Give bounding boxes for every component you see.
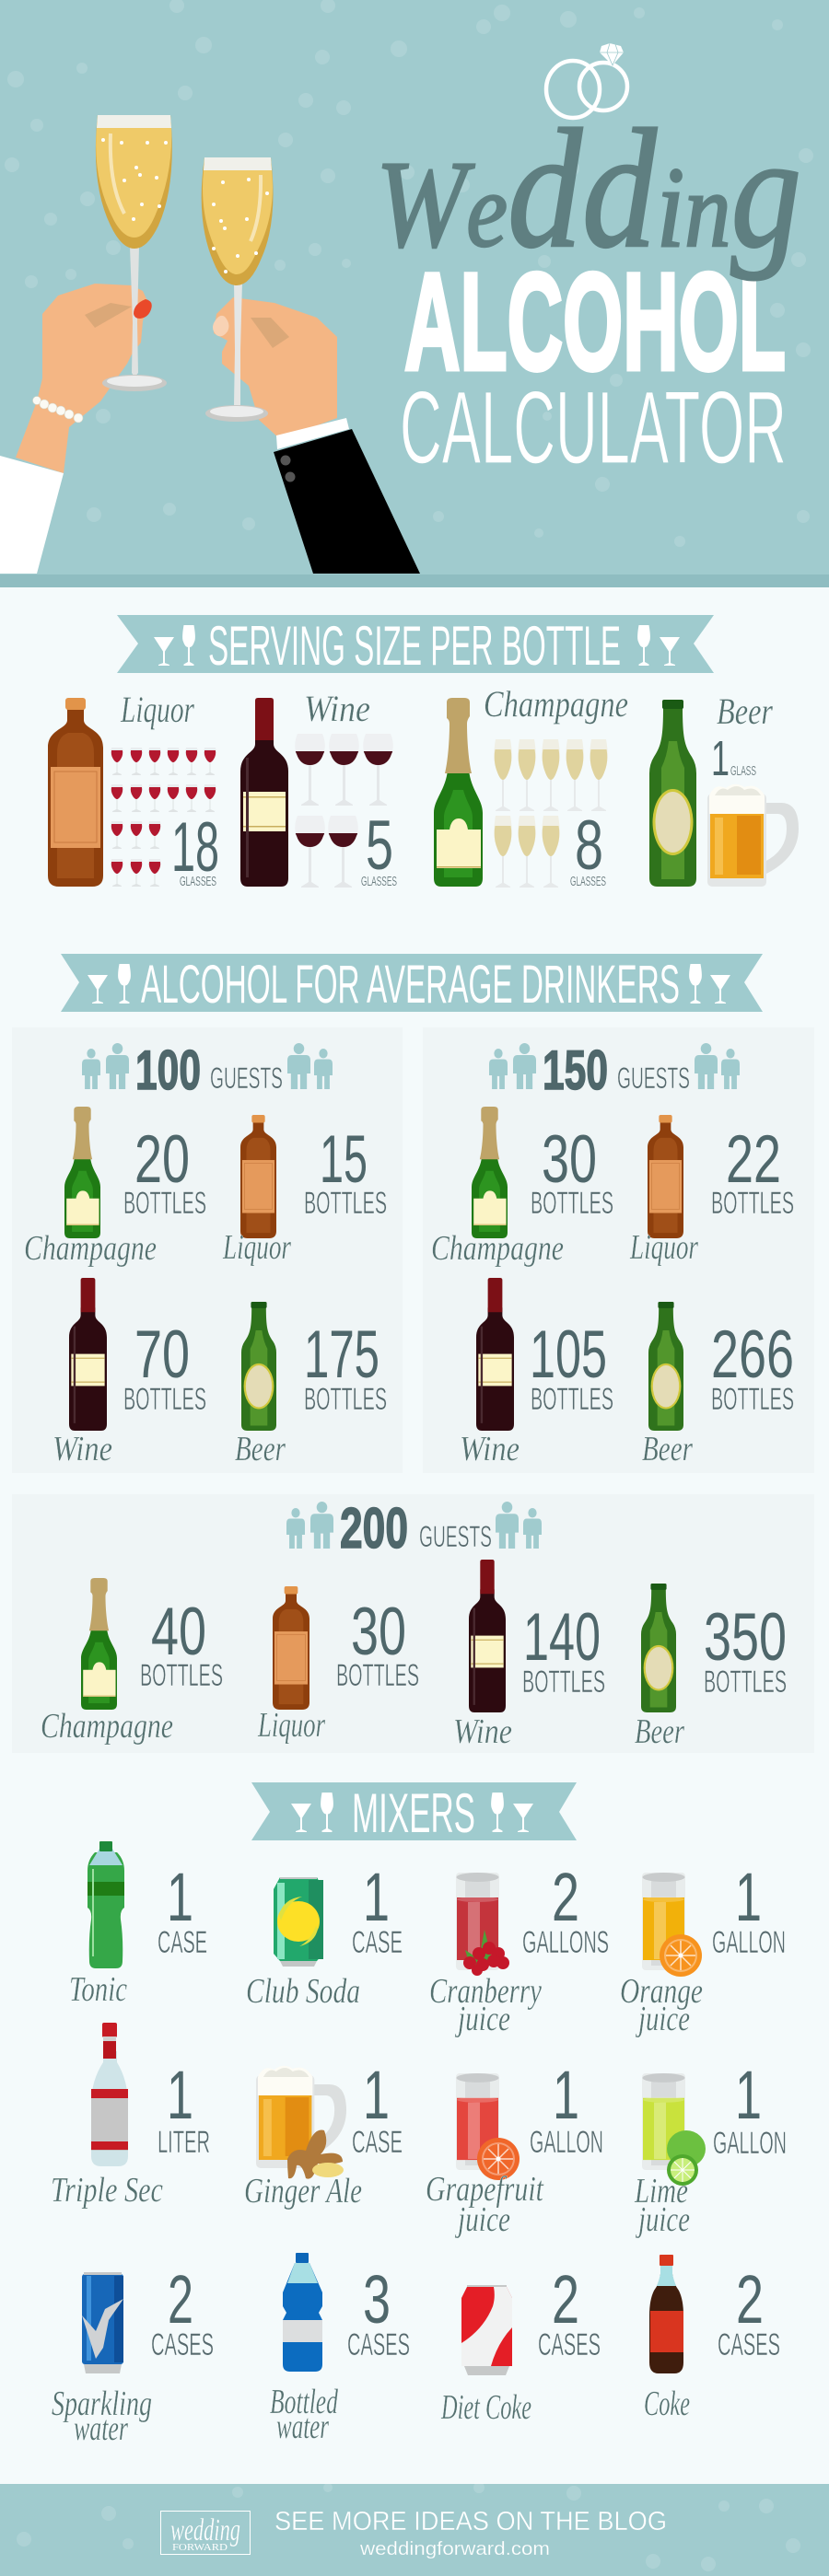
bokeh dots bbox=[5, 0, 813, 547]
beer: 350 bottles: Beer bbox=[635, 1712, 684, 1751]
liquor serving group: GLASSES bbox=[180, 875, 216, 889]
mixer: tonic: 1 bbox=[167, 1859, 193, 1935]
champagne: 20 bottles: Champagne bbox=[24, 1229, 157, 1268]
thumb nail bbox=[213, 316, 228, 336]
mixer: sparkling water bbox=[52, 2261, 214, 2448]
right hand bbox=[214, 297, 337, 439]
mixer: diet coke bbox=[440, 2261, 601, 2427]
beer serving group: 1 bbox=[711, 731, 730, 786]
champagne serving group: GLASSES bbox=[570, 875, 606, 889]
liquor: 30 bottles bbox=[257, 1586, 419, 1745]
beer: 266 bottles: 266 bbox=[711, 1317, 794, 1392]
mixer: coke: CASES bbox=[718, 2327, 780, 2362]
mixer: bottled water bbox=[270, 2253, 410, 2446]
wine: 140 bottles: BOTTLES bbox=[522, 1665, 605, 1700]
footer url: weddingforward.com bbox=[359, 2539, 550, 2559]
title: Wedding: Wedding bbox=[376, 95, 801, 284]
mixer: orange juice: 1 bbox=[735, 1859, 762, 1935]
footer bbox=[0, 2482, 829, 2576]
groom's sleeve bbox=[274, 418, 420, 574]
wine: 140 bottles: 140 bbox=[523, 1600, 601, 1675]
mixer: coke: 2 bbox=[736, 2261, 764, 2338]
beer serving group bbox=[649, 690, 799, 887]
icon: mug with ginger bbox=[256, 2066, 346, 2179]
champagne: 20 bottles: 20 bbox=[134, 1122, 190, 1197]
guests heading: 150: 150 bbox=[543, 1039, 608, 1101]
wine: 105 bottles: Wine bbox=[460, 1430, 520, 1468]
icon: diet coke can bbox=[461, 2285, 512, 2375]
guests heading: 100: 100 bbox=[135, 1039, 201, 1101]
mixer: grapefruit juice: GALLON bbox=[530, 2125, 603, 2160]
mixer: grapefruit juice bbox=[426, 2057, 603, 2239]
mixer: lime juice: Lime bbox=[634, 2172, 688, 2210]
mixer: triple sec: Triple Sec bbox=[51, 2171, 163, 2210]
banner: mixers: MIXERS bbox=[352, 1782, 475, 1844]
banner: mixers bbox=[251, 1782, 577, 1844]
liquor: 30 bottles: Liquor bbox=[257, 1706, 325, 1745]
wine: 105 bottles bbox=[460, 1278, 613, 1468]
guests heading: 200: 200 bbox=[340, 1497, 408, 1561]
icon: glass with lime bbox=[642, 2073, 706, 2186]
wine: 105 bottles: BOTTLES bbox=[531, 1382, 613, 1417]
mixer: lime juice: 1 bbox=[735, 2057, 762, 2133]
mixer: grapefruit juice: Grapefruit bbox=[426, 2170, 544, 2209]
mixer: grapefruit juice: juice bbox=[454, 2200, 510, 2239]
panel: 100 guests bbox=[12, 1027, 403, 1473]
mixer: coke: Coke bbox=[644, 2385, 690, 2423]
beer: 266 bottles: Beer bbox=[642, 1430, 693, 1468]
mixer: diet coke: 2 bbox=[552, 2261, 579, 2338]
liquor: 30 bottles: 30 bbox=[351, 1595, 406, 1669]
logo: wedding forward: wedding bbox=[170, 2513, 240, 2547]
mixer: sparkling water: water bbox=[74, 2409, 128, 2448]
icon: club soda can bbox=[274, 1877, 323, 1967]
mixer: ginger ale bbox=[244, 2057, 403, 2210]
wine serving group bbox=[240, 688, 397, 889]
mixer: bottled water: 3 bbox=[363, 2261, 391, 2338]
liquor: 22 bottles: 22 bbox=[726, 1122, 781, 1197]
wine: 70 bottles: 70 bbox=[134, 1317, 190, 1392]
mixer: club soda: 1 bbox=[363, 1859, 390, 1935]
wine: 70 bottles: BOTTLES bbox=[123, 1382, 206, 1417]
beer serving group: Beer bbox=[717, 690, 773, 732]
champagne: 20 bottles: BOTTLES bbox=[123, 1186, 206, 1221]
beer: 350 bottles bbox=[635, 1584, 787, 1751]
mixer: triple sec: 1 bbox=[167, 2057, 193, 2133]
mixer: diet coke: CASES bbox=[538, 2327, 601, 2362]
right champagne glass bbox=[202, 157, 273, 422]
mixer: coke bbox=[644, 2255, 780, 2423]
champagne: 40 bottles: Champagne bbox=[41, 1707, 173, 1746]
liquor: 22 bottles: Liquor bbox=[629, 1228, 698, 1267]
icon: triple sec bottle bbox=[91, 2023, 128, 2166]
guests heading: 200 bbox=[286, 1497, 542, 1561]
mixer: orange juice: juice bbox=[635, 2000, 690, 2038]
mixer: grapefruit juice: 1 bbox=[553, 2057, 579, 2133]
icon: coke bottle bbox=[649, 2255, 683, 2373]
beer serving group: GLASS bbox=[730, 764, 756, 779]
mixer: bottled water: CASES bbox=[347, 2327, 410, 2362]
icon: sparkling water can bbox=[82, 2272, 123, 2373]
liquor: 15 bottles: Liquor bbox=[222, 1228, 291, 1267]
wine serving group: Wine bbox=[304, 688, 370, 729]
champagne: 30 bottles bbox=[431, 1107, 613, 1268]
mixer: triple sec: LITER bbox=[158, 2125, 210, 2160]
mixer: orange juice bbox=[620, 1859, 786, 2038]
champagne serving group bbox=[434, 683, 628, 889]
guests heading: 100 bbox=[82, 1039, 333, 1101]
logo: wedding forward: FORWARD bbox=[172, 2542, 228, 2553]
mixer: orange juice: Orange bbox=[620, 1972, 703, 2011]
panel: 200 guests bbox=[12, 1494, 814, 1753]
header panel bbox=[0, 0, 829, 587]
beer: 175 bottles: 175 bbox=[304, 1317, 379, 1392]
logo: wedding forward bbox=[160, 2512, 251, 2554]
guests heading: 150: GUESTS bbox=[617, 1062, 690, 1095]
champagne: 30 bottles: Champagne bbox=[431, 1229, 564, 1268]
beer: 266 bottles bbox=[642, 1302, 794, 1468]
beer: 175 bottles: BOTTLES bbox=[304, 1382, 387, 1417]
mixer: club soda: Club Soda bbox=[246, 1972, 360, 2011]
panel: 150 guests bbox=[423, 1027, 814, 1473]
mixer: sparkling water: Sparkling bbox=[52, 2385, 152, 2423]
champagne: 30 bottles: BOTTLES bbox=[531, 1186, 613, 1221]
liquor: 30 bottles: BOTTLES bbox=[336, 1658, 419, 1693]
champagne: 40 bottles: BOTTLES bbox=[140, 1658, 223, 1693]
mixer: cranberry juice: juice bbox=[454, 2000, 510, 2038]
guests heading: 150 bbox=[489, 1039, 740, 1101]
champagne serving group: 8 bbox=[575, 806, 603, 885]
mixer: cranberry juice bbox=[429, 1859, 609, 2038]
mixer: lime juice: juice bbox=[635, 2200, 690, 2239]
champagne: 40 bottles: 40 bbox=[151, 1595, 206, 1669]
icon: tonic bottle bbox=[88, 1841, 124, 1968]
mixer: tonic: Tonic bbox=[69, 1970, 127, 2009]
liquor serving group: 18 bbox=[171, 808, 219, 887]
mixer: ginger ale: Ginger Ale bbox=[244, 2172, 362, 2210]
champagne serving group: Champagne bbox=[484, 683, 628, 725]
mixer: bottled water: Bottled bbox=[270, 2383, 339, 2421]
wine: 140 bottles: Wine bbox=[453, 1712, 512, 1751]
liquor serving group: Liquor bbox=[120, 689, 194, 730]
mixer: cranberry juice: Cranberry bbox=[429, 1972, 542, 2011]
champagne: 20 bottles bbox=[24, 1107, 206, 1268]
mixer: tonic: CASE bbox=[158, 1925, 207, 1960]
beer: 350 bottles: 350 bbox=[704, 1600, 787, 1675]
mixer: triple sec bbox=[51, 2023, 210, 2210]
wine serving group: 5 bbox=[366, 806, 393, 885]
pearl bracelet bbox=[33, 396, 83, 423]
wine: 70 bottles: Wine bbox=[53, 1430, 112, 1468]
mixer: cranberry juice: 2 bbox=[552, 1859, 579, 1935]
wine serving group: GLASSES bbox=[361, 875, 397, 889]
champagne: 30 bottles: 30 bbox=[542, 1122, 597, 1197]
liquor: 15 bottles: BOTTLES bbox=[304, 1186, 387, 1221]
liquor: 15 bottles: 15 bbox=[320, 1122, 368, 1197]
champagne: 40 bottles bbox=[41, 1578, 223, 1746]
icon: glass with orange bbox=[642, 1873, 702, 1977]
beer: 175 bottles bbox=[235, 1302, 387, 1468]
mixer: ginger ale: CASE bbox=[352, 2125, 403, 2160]
mixer: lime juice bbox=[634, 2057, 787, 2239]
liquor: 15 bottles bbox=[222, 1115, 387, 1267]
section 1: serving size per bottle bbox=[48, 615, 799, 889]
icon: bottled water bottle bbox=[283, 2253, 322, 2372]
liquor serving group bbox=[48, 689, 219, 889]
wine: 105 bottles: 105 bbox=[530, 1317, 607, 1392]
mixer: tonic bbox=[69, 1841, 207, 2009]
beer: 175 bottles: Beer bbox=[235, 1430, 286, 1468]
mixer: diet coke: Diet Coke bbox=[440, 2388, 531, 2427]
guests heading: 100: GUESTS bbox=[210, 1062, 283, 1095]
icon: glass with grapefruit bbox=[456, 2073, 520, 2180]
bride's red nail bbox=[134, 299, 152, 319]
mixer: sparkling water: CASES bbox=[151, 2327, 214, 2362]
left champagne glass bbox=[96, 115, 172, 391]
guests heading: 200: GUESTS bbox=[419, 1520, 492, 1553]
wine: 140 bottles bbox=[453, 1560, 605, 1751]
wine: 70 bottles bbox=[53, 1278, 206, 1468]
mixer: ginger ale: 1 bbox=[363, 2057, 390, 2133]
mixer: club soda bbox=[246, 1859, 403, 2011]
left hand with pearl bracelet bbox=[0, 284, 148, 574]
liquor: 22 bottles bbox=[629, 1115, 794, 1267]
mixer: club soda: CASE bbox=[352, 1925, 403, 1960]
footer bokeh dots bbox=[17, 2482, 800, 2571]
mixer: bottled water: water bbox=[276, 2408, 329, 2446]
mixer: cranberry juice: GALLONS bbox=[522, 1925, 609, 1960]
footer call to action: SEE MORE IDEAS ON THE BLOG bbox=[274, 2507, 667, 2536]
icon: glass with cranberries bbox=[456, 1873, 509, 1976]
icon: wedding rings bbox=[546, 43, 627, 118]
mixer: sparkling water: 2 bbox=[168, 2261, 193, 2338]
